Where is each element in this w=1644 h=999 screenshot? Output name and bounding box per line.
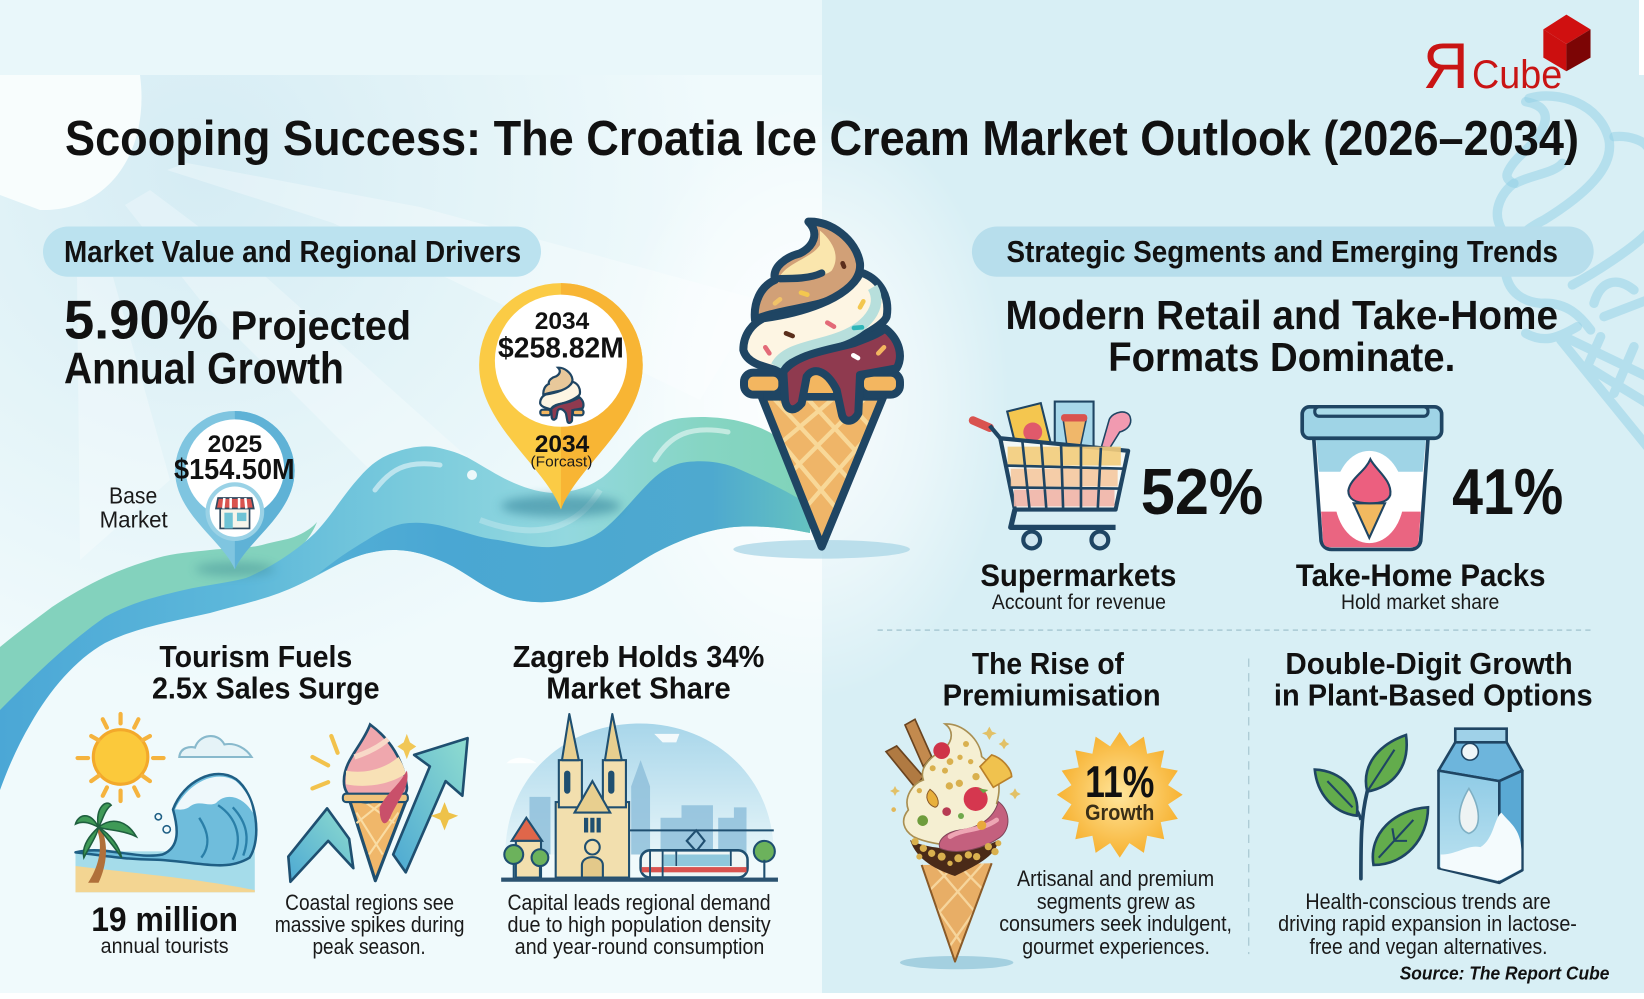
text: artisanal: Artisanal and premium [1017,866,1214,891]
text: artisanal [999,866,1232,959]
section pill: strategic segments: Strategic Segments and Emerging Trends [1007,235,1558,269]
text: coastal regions [275,890,464,959]
map pin: 2034 forecast: 2034 [535,431,590,458]
heading: zagreb: Zagreb Holds 34% [513,640,764,674]
icon: plant milk carton [1439,729,1522,883]
badge: 11 percent growth: Growth [1085,800,1154,825]
icon: plant leaves [1315,735,1428,879]
text: capital demand: Capital leads regional demand [507,890,771,915]
text: capital demand: and year-round consumption [515,934,764,959]
headline: projected annual growth [64,290,411,394]
icon: sun [78,714,164,801]
section pill: market value: Market Value and Regional Drivers [64,235,521,269]
stat: 19 million tourists [91,901,238,958]
text: artisanal: segments grew as [1037,889,1195,914]
map pin: 2025 base market: 2025 [208,431,262,458]
label: take-home packs [1296,558,1545,614]
text: health-conscious [1278,889,1577,959]
label: take-home packs: Take-Home Packs [1296,558,1545,593]
stat: 19 million tourists: 19 million [91,901,238,939]
stat: 19 million tourists: annual tourists [101,935,229,958]
label: supermarkets: Supermarkets [980,558,1176,593]
text: coastal regions: Coastal regions see [285,890,454,915]
heading: zagreb: Market Share [546,671,731,705]
watermark: outline ice cream [1497,96,1644,447]
heading: tourism: 2.5x Sales Surge [152,671,380,705]
heading: tourism [152,640,380,705]
heading: modern retail: Formats Dominate. [1108,334,1455,380]
heading: premiumisation: Premiumisation [943,679,1161,713]
label: supermarkets: Account for revenue [992,591,1166,614]
stat: 52 percent: 52% [1141,455,1263,528]
heading: plant-based: in Plant-Based Options [1274,679,1593,713]
badge: 11 percent growth: 11% [1085,758,1154,807]
label: take-home packs: Hold market share [1341,591,1499,614]
heading: modern retail [1005,292,1558,380]
text: health-conscious: Health-conscious trends are [1305,889,1551,914]
text: coastal regions: massive spikes during [275,912,464,937]
map pin: 2034 forecast: 2034 [535,308,590,335]
headline: projected annual growth: Projected [231,303,411,349]
section pill: market value [43,226,541,277]
icon: ice cream tub [1302,407,1442,549]
logo: RCube [1423,15,1591,102]
text: artisanal: gourmet experiences. [1022,934,1210,959]
icon: mini ice cream [540,368,583,423]
text: health-conscious: free and vegan alternatives. [1310,934,1548,959]
heading: plant-based: Double-Digit Growth [1285,647,1573,681]
map pin: 2025 base market: $154.50M [174,453,295,485]
text: health-conscious: driving rapid expansion in lactose- [1278,911,1577,936]
source note: Source: The Report Cube [1400,962,1609,983]
map pin: 2025 base market [174,411,295,569]
icon: ice cream with rising arrow [288,724,468,882]
icon: shopping cart [973,402,1131,548]
map pin: 2034 forecast: $258.82M [498,332,624,364]
stat: 41 percent: 41% [1452,455,1563,528]
text: capital demand: due to high population density [507,912,771,937]
wave ribbon [0,417,810,790]
heading: plant-based [1274,647,1593,713]
label: base market: Market [100,506,168,532]
text: capital demand [507,890,771,959]
label: base market [100,482,168,532]
icon: Zagreb cityscape [501,714,778,882]
badge: 11 percent growth [1057,732,1183,858]
logo: RCube: Cube [1472,53,1562,97]
icon: beach and wave [75,714,256,892]
heading: premiumisation: The Rise of [972,647,1125,681]
heading: tourism: Tourism Fuels [159,640,352,674]
section pill: strategic segments [972,226,1594,277]
label: base market: Base [109,482,157,508]
icon: palm tree [75,803,136,883]
headline: projected annual growth: Annual Growth [64,345,344,394]
label: supermarkets [980,558,1176,614]
headline: projected annual growth: 5.90% [64,290,218,351]
icon: premium ice cream cone [886,719,1021,969]
heading: zagreb [513,640,764,705]
central ice cream cone [733,222,920,559]
map pin: 2034 forecast [479,283,643,510]
heading: premiumisation [943,647,1161,713]
logo: RCube: Я [1423,29,1469,102]
text: coastal regions: peak season. [312,934,426,959]
icon: store [216,498,254,528]
heading: modern retail: Modern Retail and Take-Home [1005,292,1558,338]
text: artisanal: consumers seek indulgent, [999,911,1232,936]
map pin: 2034 forecast: (Forcast) [531,455,592,471]
icon: cloud [179,736,252,757]
